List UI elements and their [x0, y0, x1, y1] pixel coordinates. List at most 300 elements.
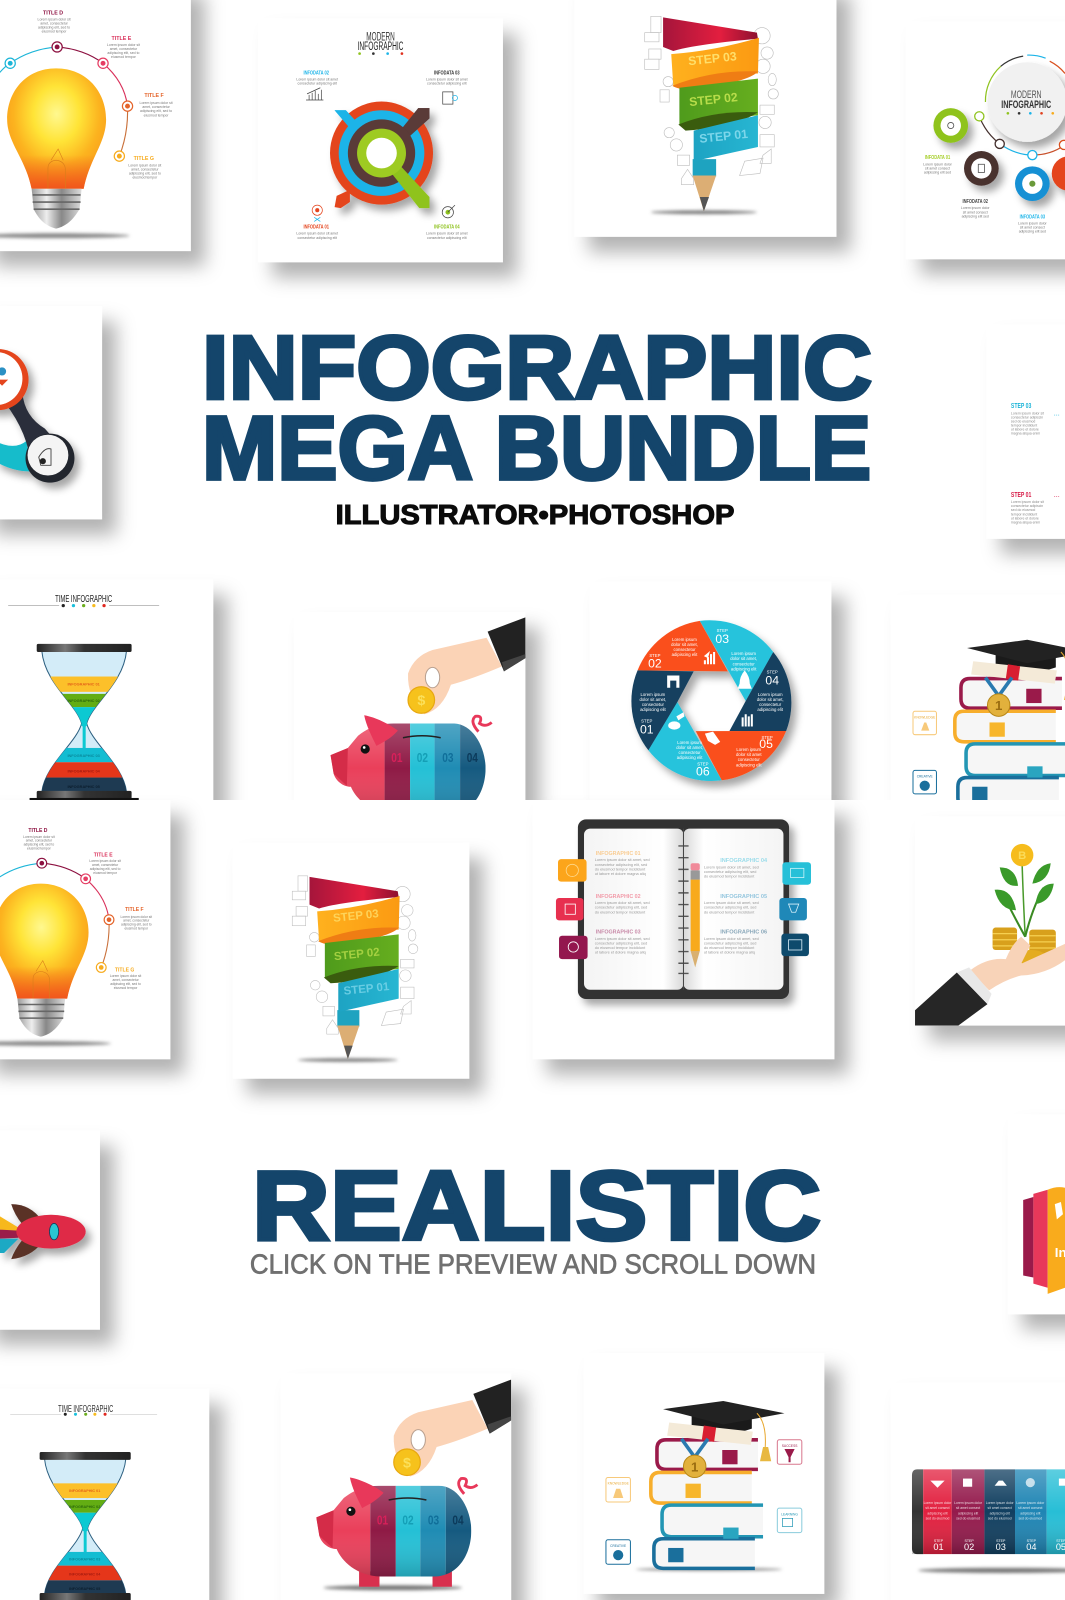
illustration: bulb second: adipiscing elit, sed to — [90, 867, 121, 871]
small icons — [306, 88, 458, 221]
ring labels: 05 — [759, 737, 773, 751]
notebook text right: Lorem ipsum dolor sit amet, sed — [704, 864, 759, 869]
ribbon step labels: STEP 02 — [688, 90, 739, 109]
panel: rocket card — [0, 1131, 100, 1330]
chart: concentric target — [330, 102, 433, 208]
ring labels: consectetur — [733, 661, 755, 666]
illustration: rocket — [0, 1204, 86, 1259]
label icons: CREATIVE — [917, 775, 934, 779]
pencil — [691, 863, 700, 967]
step labels: ut labore et dolore — [1011, 428, 1039, 432]
illustration: piggy bank: 03 — [442, 750, 453, 765]
battery step labels: adipiscing elit — [990, 1511, 1010, 1515]
notebook text right: INFOGRAPHIC 04 — [720, 858, 768, 864]
step labels: ut labore et dolore — [1011, 516, 1039, 520]
ring labels: 03 — [715, 632, 729, 646]
icons in circles — [0, 367, 51, 465]
illustration: ribbon pencil second: STEP 03 — [333, 908, 379, 925]
ring labels: adipiscing elit — [736, 762, 762, 767]
battery step labels: sed do eiusmod — [926, 1516, 949, 1520]
tabs right — [779, 862, 811, 956]
ring labels: consectetur — [738, 757, 760, 762]
step labels: magna aliqua enim — [1011, 520, 1040, 524]
ring labels: STEP — [717, 628, 728, 633]
illustration: bulb second: Lorem ipsum dolor sit — [89, 859, 121, 863]
battery step labels — [924, 1501, 1065, 1552]
subtitle: illustrator photoshop: ILLUSTRATOR•PHOTOSHOP — [336, 499, 734, 530]
panel: target infographic — [258, 18, 503, 262]
ribbon step labels: STEP 01 — [699, 127, 749, 146]
illustration: book stack second — [636, 1401, 784, 1571]
label icons second: CREATIVE — [610, 1544, 627, 1548]
white divider covering lower row start — [0, 800, 1065, 1600]
illustration: piggy bank second: 04 — [452, 1512, 464, 1527]
illustration: bulb second: TITLE D — [28, 828, 48, 834]
infodata labels: consectetur adipiscing elit — [297, 236, 337, 240]
battery step labels: Lorem ipsum dolor — [954, 1501, 983, 1505]
bulb labels: eiusmod tempor — [132, 176, 158, 180]
illustration: piggy bank second: 01 — [377, 1512, 388, 1527]
bulb labels: amet, consectetur — [40, 21, 69, 25]
notebook text right: do eiusmod tempor incididunt — [704, 909, 755, 914]
notebook text left: ut labore et dolore magna aliq — [595, 950, 646, 955]
notebook text left: consectetur adipiscing elit, sed — [595, 862, 647, 867]
step labels: sed do eiusmod — [1011, 419, 1035, 423]
hourglass labels: INFOGRAPHIC 05 — [67, 784, 101, 789]
illustration: bulb second: eiusmod tempor — [114, 986, 138, 990]
step labels: tempor incididunt — [1011, 512, 1037, 516]
illustration: hourglass second: INFOGRAPHIC 01 — [69, 1489, 100, 1493]
panel: six step ring — [590, 582, 831, 827]
bulb labels: TITLE G — [134, 156, 154, 162]
ring labels: adipiscing elit — [757, 707, 784, 712]
battery step labels: sed do eiusmod — [956, 1516, 980, 1520]
bulb labels: adipiscing elit, sed to — [129, 171, 161, 175]
illustration: piggy bank second — [306, 1478, 479, 1590]
notebook text right — [704, 858, 768, 955]
ring labels: STEP — [767, 669, 778, 674]
card: piggy bank second — [281, 1373, 511, 1600]
heading: modern infographic: MODERN — [366, 30, 395, 43]
panel: right steps card — [986, 324, 1065, 539]
panel: battery timeline — [891, 1383, 1065, 1600]
illustration: ribbon pencil second: STEP 02 — [333, 947, 380, 963]
ring labels: Lorem ipsum — [641, 692, 666, 697]
bulb labels: adipiscing elit, sed to — [107, 51, 140, 55]
node labels: sit amet consect — [963, 210, 988, 214]
node pins — [933, 108, 1065, 201]
panel: pencil ribbon top — [574, 0, 836, 237]
title: realistic: REALISTIC — [252, 1150, 821, 1260]
battery step labels: STEP — [934, 1539, 944, 1543]
bulb labels: eiusmod tempor — [144, 113, 169, 117]
node labels — [923, 155, 1047, 234]
node labels: sit amet consect — [925, 166, 950, 170]
illustration: bulb second: amet, consectetur — [123, 919, 150, 923]
panel: piggy bank second — [281, 1373, 511, 1600]
illustration: bulb second — [0, 828, 152, 1046]
label icons second: SUCCESS — [782, 1444, 798, 1448]
card: bulb — [0, 0, 191, 251]
card: battery — [891, 1383, 1065, 1600]
bulb labels: amet, consectetur — [110, 47, 138, 51]
chart: ring segments — [631, 620, 791, 781]
node labels: INFODATA 01 — [925, 155, 950, 161]
notebook text left: do eiusmod tempor incididunt — [595, 945, 646, 950]
illustration: hourglass second: INFOGRAPHIC 02 — [69, 1505, 100, 1509]
battery step labels: STEP — [996, 1539, 1006, 1543]
illustration: bulb second: amet, consectetur — [92, 863, 119, 867]
illustration: book stack: 1 — [995, 698, 1002, 713]
infodata labels — [296, 70, 468, 240]
ring labels: consectetur — [759, 702, 782, 707]
infodata labels: consectetur adipiscing elit — [297, 82, 337, 86]
illustration: bulb second: adipiscing elit, sed to — [110, 982, 141, 986]
battery step labels: 01 — [933, 1542, 944, 1552]
ring labels: dolor sit amet — [736, 752, 762, 757]
subtitle: click on the preview: CLICK ON THE PREVIEW AND SCROLL DOWN — [250, 1248, 816, 1279]
notebook text left: ut labore et dolore magna aliq — [595, 871, 646, 876]
ring labels: dolor sit amet, — [639, 697, 666, 702]
bulb labels: amet, consectetur — [142, 105, 171, 109]
label icons second: LEARNING — [781, 1512, 798, 1516]
bulb labels: adipiscing elit, sed to — [140, 109, 172, 113]
node labels: INFODATA 03 — [1020, 214, 1045, 220]
ring labels: Lorem ipsum — [672, 637, 697, 642]
notebook text left: Lorem ipsum dolor sit amet, sed — [595, 936, 650, 941]
battery step labels: sit amet consect — [925, 1506, 950, 1510]
bulb labels: TITLE F — [144, 93, 165, 99]
battery step labels: sed do eiusmod — [1018, 1516, 1042, 1520]
bulb labels: Lorem ipsum dolor sit — [107, 43, 140, 47]
step labels: STEP 03 — [1011, 402, 1031, 410]
illustration: hand and sleeve — [915, 937, 1065, 1026]
step labels: magna aliqua enim — [1011, 432, 1040, 436]
card: pencil — [574, 0, 836, 237]
infodata labels: INFODATA 02 — [303, 70, 329, 76]
step labels: ... — [1054, 409, 1060, 417]
notebook text right: do eiusmod tempor incididunt — [704, 874, 755, 879]
icon: light bulb — [0, 68, 130, 238]
battery step labels: adipiscing elit — [1020, 1511, 1040, 1515]
title: infographic mega bundle: MEGA BUNDLE — [202, 399, 871, 499]
bulb labels: TITLE E — [112, 36, 132, 42]
illustration: battery segments — [912, 1469, 1065, 1573]
timeline arc — [0, 47, 128, 156]
illustration: bulb second: TITLE G — [115, 967, 134, 973]
step labels: consectetur adipiscin — [1011, 415, 1043, 419]
notebook text right: INFOGRAPHIC 05 — [720, 894, 767, 900]
illustration: book stack — [955, 640, 1065, 807]
step labels: consectetur adipiscin — [1011, 504, 1043, 508]
ring labels: 04 — [765, 674, 779, 688]
step labels: Lorem ipsum dolor sit — [1011, 411, 1044, 415]
notebook text right: consectetur adipiscing elit, sed — [704, 905, 756, 910]
panel: money plant — [915, 816, 1065, 1026]
ring labels: adipiscing elit — [640, 707, 666, 712]
node labels: adipiscing elit sed — [962, 214, 989, 218]
panel: right folded brochure — [1008, 1114, 1065, 1314]
ring labels: STEP — [762, 735, 773, 740]
card: nodes — [906, 21, 1065, 259]
ring labels: adipiscing elit — [731, 666, 757, 671]
card: pencil second — [233, 843, 469, 1079]
notebook text right: Lorem ipsum dolor sit amet, sed — [704, 936, 759, 941]
card: rocket — [0, 1131, 100, 1330]
card: target — [258, 18, 503, 262]
spiral rings — [678, 829, 689, 990]
panel: circle nodes infographic — [906, 21, 1065, 259]
infodata labels: Lorem ipsum dolor sit amet — [296, 78, 338, 82]
bulb labels: adipiscing elit, sed to — [38, 26, 70, 30]
illustration: piggy bank: 01 — [391, 750, 402, 765]
ring labels: consectetur — [673, 647, 696, 652]
card: plant — [915, 816, 1065, 1026]
illustration: piggy bank — [330, 714, 492, 800]
infodata labels: consectetur adipiscing elit — [427, 82, 467, 86]
heading: time infographic: TIME INFOGRAPHIC — [55, 594, 112, 605]
panel: hourglass top — [0, 580, 213, 824]
battery step labels: sed do eiusmod — [988, 1516, 1012, 1520]
ring labels: Lorem ipsum — [736, 747, 762, 752]
illustration: hourglass second: INFOGRAPHIC 04 — [69, 1572, 101, 1576]
illustration: book stack second: 1 — [691, 1459, 698, 1474]
illustration: plant and coins: B — [1018, 850, 1026, 862]
battery step labels: 02 — [964, 1542, 974, 1552]
illustration: bulb second: Lorem ipsum dolor sit — [23, 835, 55, 839]
card: hourglass second — [0, 1389, 209, 1600]
node labels: adipiscing elit sed — [1019, 230, 1046, 234]
label icons second — [606, 1440, 802, 1564]
hourglass labels: INFOGRAPHIC 02 — [67, 698, 100, 703]
battery step labels: adipiscing elit — [958, 1511, 978, 1515]
hourglass labels: INFOGRAPHIC 04 — [67, 768, 101, 773]
illustration: hand with coin: $ — [417, 693, 425, 709]
ring labels: 06 — [696, 765, 710, 779]
illustration: hourglass second: INFOGRAPHIC 05 — [69, 1587, 100, 1591]
card: brochure — [1008, 1114, 1065, 1314]
illustration: piggy bank: 04 — [467, 750, 479, 765]
notebook text left — [595, 851, 650, 955]
notebook text left: INFOGRAPHIC 03 — [596, 930, 641, 936]
notebook text right: ut labore et dolore magna aliq — [704, 950, 755, 955]
illustration: plant and coins — [993, 844, 1056, 964]
illustration: bulb second: adipiscing elit, sed to — [24, 843, 54, 847]
illustration: piggy bank: 02 — [417, 750, 428, 765]
ring labels: STEP — [697, 761, 709, 766]
title: infographic mega bundle — [202, 318, 872, 499]
battery icons — [930, 1478, 1065, 1488]
ring labels: dolor sit amet, — [671, 642, 698, 647]
panel: left blob infographic — [0, 306, 102, 519]
battery step labels: Lorem ipsum dolor — [1016, 1501, 1045, 1505]
step labels: tempor incididunt — [1011, 424, 1037, 428]
infodata labels: Lorem ipsum dolor sit amet — [426, 78, 468, 82]
notebook text right: consectetur adipiscing elit, sed — [704, 869, 756, 874]
illustration: bulb second: eiusmod tempor — [124, 926, 149, 930]
panel: notebook — [532, 800, 834, 1059]
battery step labels: 04 — [1026, 1542, 1036, 1552]
bulb labels: Lorem ipsum dolor sit — [128, 163, 161, 167]
battery step labels: adipiscing elit — [927, 1511, 948, 1515]
ring labels: dolor sit amet, — [676, 745, 703, 750]
illustration: brochure — [1023, 1187, 1065, 1294]
hourglass labels: INFOGRAPHIC 01 — [67, 682, 101, 687]
big title circle — [987, 62, 1065, 142]
arc nodes — [5, 42, 133, 161]
panel: piggy bank top — [330, 617, 550, 800]
step labels: Lorem ipsum dolor sit — [1011, 500, 1044, 504]
step labels: ... — [1054, 491, 1060, 499]
ring labels: 01 — [640, 723, 654, 737]
notebook text left: do eiusmod tempor incididunt — [595, 866, 646, 871]
battery step labels: STEP — [1027, 1539, 1037, 1543]
ring labels: STEP — [649, 653, 661, 658]
bulb labels: Lorem ipsum dolor sit — [38, 17, 71, 21]
battery step labels: 03 — [996, 1542, 1006, 1552]
panel: light bulb infographic top — [0, 0, 191, 251]
label icons — [913, 711, 936, 794]
illustration: bulb second: TITLE F — [125, 907, 144, 913]
panel: pencil ribbon second — [233, 843, 469, 1079]
ring labels: dolor sit amet, — [730, 656, 757, 661]
battery step labels: Lorem ipsum dolor — [986, 1501, 1014, 1505]
ribbon step labels: STEP 03 — [687, 49, 738, 68]
node labels: INFODATA 02 — [962, 199, 988, 205]
illustration: bulb second: eiusmod tempor — [93, 871, 118, 875]
battery step labels: sit amet consect — [1018, 1506, 1043, 1510]
ring labels: consectetur — [642, 702, 664, 707]
notebook text right: consectetur adipiscing elit, sed — [704, 940, 756, 945]
card: ring — [590, 582, 831, 827]
hourglass labels — [67, 682, 101, 789]
ring labels: Lorem ipsum — [677, 740, 702, 745]
ring labels: STEP — [641, 718, 652, 723]
bulb labels — [38, 10, 173, 180]
label icons second: KNOWLEDGE — [608, 1482, 630, 1486]
illustration: bulb second: Lorem ipsum dolor sit — [110, 974, 141, 978]
connector curve — [979, 55, 1065, 155]
notebook text left: consectetur adipiscing elit, sed — [595, 940, 647, 945]
big title circle: MODERN — [1011, 89, 1042, 101]
heading: time infographic second — [10, 1404, 157, 1416]
card: notebook — [532, 800, 834, 1059]
ring labels: consectetur — [679, 750, 701, 755]
battery step labels: sit amet consect — [956, 1506, 980, 1510]
label icons: KNOWLEDGE — [914, 715, 936, 719]
illustration: hourglass — [30, 644, 139, 802]
ring labels: adipiscing elit — [672, 652, 698, 657]
tabs left — [556, 859, 588, 959]
doodles around pencil — [645, 16, 778, 185]
card: books — [891, 595, 1065, 824]
step labels — [1011, 402, 1060, 524]
illustration: hand with coin second — [394, 1380, 511, 1477]
bulb labels: TITLE D — [43, 10, 63, 16]
bulb labels: amet, consectetur — [131, 167, 159, 171]
heading: modern infographic: INFOGRAPHIC — [358, 40, 404, 53]
illustration: hand with coin — [408, 617, 525, 714]
notebook text right: do eiusmod tempor incididunt — [704, 945, 755, 950]
node labels: Lorem ipsum dolor — [1018, 221, 1047, 225]
bulb labels: eiusmod tempor — [111, 55, 137, 59]
illustration: bulb second: eiusmod tempor — [27, 847, 52, 851]
card: steps — [986, 324, 1065, 539]
card: books second — [584, 1353, 824, 1594]
node labels: Lorem ipsum dolor — [923, 162, 953, 166]
infodata labels: Lorem ipsum dolor sit amet — [426, 232, 468, 236]
node labels: Lorem ipsum dolor — [961, 206, 990, 210]
notebook text left: Lorem ipsum dolor sit amet, sed — [595, 857, 650, 862]
hourglass labels: INFOGRAPHIC 03 — [67, 753, 100, 758]
ring labels: adipiscing elit — [677, 755, 703, 760]
illustration: piggy bank second: 02 — [402, 1512, 414, 1527]
infodata labels: Lorem ipsum dolor sit amet — [296, 232, 338, 236]
infodata labels: INFODATA 01 — [303, 225, 329, 231]
title: infographic mega bundle: INFOGRAPHIC — [202, 318, 872, 418]
illustration: linked circles — [0, 349, 74, 483]
ring labels — [639, 628, 784, 779]
notebook text left: INFOGRAPHIC 02 — [596, 894, 641, 900]
card: bulb second — [0, 800, 170, 1059]
infodata labels: consectetur adipiscing elit — [427, 236, 467, 240]
step labels: STEP 01 — [1011, 491, 1031, 499]
illustration: ribbon pencil second: STEP 01 — [343, 981, 390, 998]
step labels: sed do eiusmod — [1011, 508, 1035, 512]
notebook text left: do eiusmod tempor incididunt — [595, 909, 646, 914]
illustration: hand with coin second: $ — [403, 1455, 411, 1471]
infodata labels: INFODATA 03 — [434, 70, 460, 76]
ring labels: Lorem ipsum — [731, 651, 756, 656]
notebook text right: Lorem ipsum dolor sit amet, sed — [704, 900, 759, 905]
notebook text left: Lorem ipsum dolor sit amet, sed — [595, 900, 650, 905]
panel: light bulb infographic second — [0, 800, 170, 1059]
ring labels: Lorem ipsum — [758, 692, 783, 697]
infodata labels: INFODATA 04 — [434, 225, 460, 231]
illustration: bulb second: amet, consectetur — [112, 978, 140, 982]
illustration: bulb second: amet, consectetur — [26, 839, 53, 843]
notebook text left: consectetur adipiscing elit, sed — [595, 905, 647, 910]
ring icons — [667, 651, 753, 745]
illustration: bulb second: adipiscing elit, sed to — [121, 923, 152, 927]
battery step labels: Lorem ipsum dolor — [924, 1501, 952, 1505]
illustration: bulb second: TITLE E — [94, 852, 113, 858]
card: piggy bank — [294, 612, 525, 824]
bulb labels: Lorem ipsum dolor sit — [140, 101, 173, 105]
node labels: sit amet consect — [1020, 226, 1045, 230]
panel: books second — [584, 1353, 824, 1594]
heading: time infographic second: TIME INFOGRAPHIC — [58, 1404, 113, 1415]
illustration: ribbon pencil second — [292, 876, 418, 1062]
illustration: hourglass second: INFOGRAPHIC 03 — [69, 1558, 100, 1562]
heading: time infographic — [8, 594, 159, 607]
battery step labels: STEP — [964, 1539, 974, 1543]
illustration: piggy bank second: 03 — [428, 1512, 439, 1527]
illustration: bulb second: Lorem ipsum dolor sit — [121, 915, 152, 919]
heading: modern infographic — [358, 30, 404, 55]
battery step labels: sit amet consect — [988, 1506, 1012, 1510]
ring labels: dolor sit amet, — [757, 697, 784, 702]
node labels: adipiscing elit sed — [924, 170, 951, 174]
notebook text right: INFOGRAPHIC 06 — [720, 930, 767, 936]
panel: hourglass second — [0, 1389, 209, 1600]
illustration: hourglass second — [40, 1452, 131, 1600]
bulb labels: eiusmod tempor — [42, 30, 67, 34]
notebook text left: INFOGRAPHIC 01 — [596, 851, 641, 857]
card: blob — [0, 306, 102, 519]
illustration: ribbon pencil — [651, 17, 759, 214]
illustration: open notebook — [578, 819, 789, 999]
